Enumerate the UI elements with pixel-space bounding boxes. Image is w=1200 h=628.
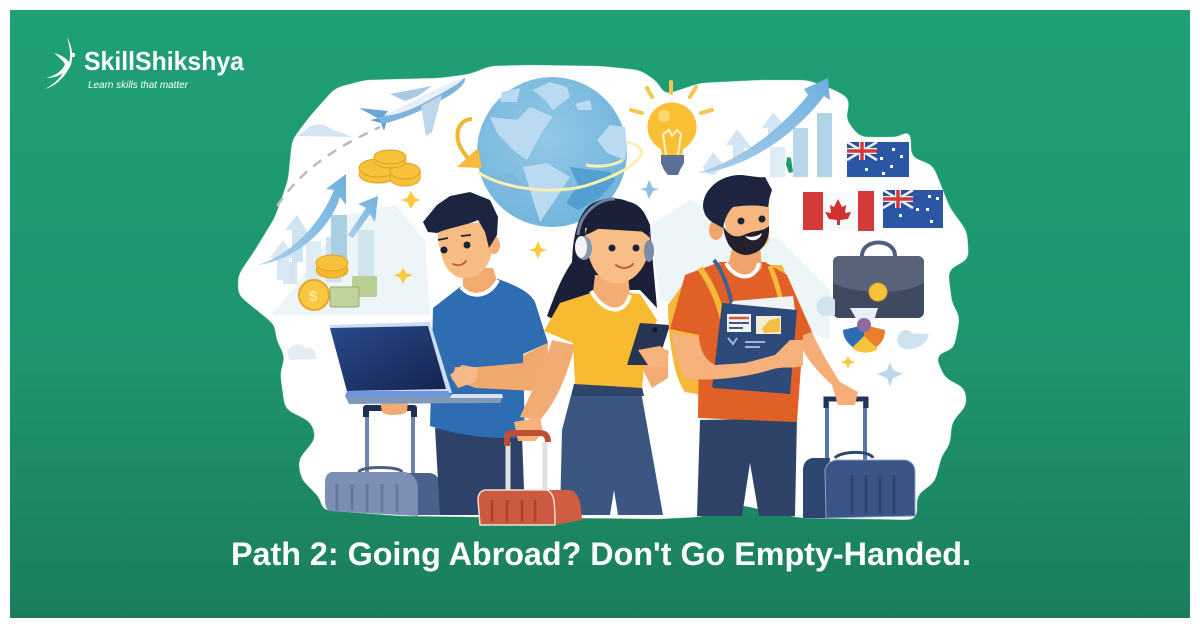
icon: briefcase	[833, 242, 924, 318]
chart ghost arrows	[270, 240, 296, 280]
green bit	[786, 157, 793, 173]
hair back	[547, 198, 657, 322]
trend arrow	[698, 78, 830, 173]
coins	[316, 262, 348, 278]
money pile	[299, 255, 377, 310]
hair	[703, 175, 772, 228]
icon: light bulb	[631, 82, 712, 175]
shirt collar	[461, 280, 498, 295]
phone forearm	[643, 350, 668, 388]
phone hand	[638, 346, 669, 368]
collar	[726, 263, 759, 277]
neck	[593, 275, 630, 307]
laptop hand under	[380, 401, 408, 415]
right growth chart	[698, 78, 832, 177]
star decoration centre	[640, 180, 659, 199]
face	[437, 222, 492, 278]
red suitcase	[478, 433, 582, 525]
chart bars	[770, 147, 785, 177]
pants	[435, 428, 525, 515]
flag: Canada	[803, 191, 874, 231]
chart trend arrow	[258, 174, 346, 265]
logo	[45, 37, 245, 91]
person: man	[668, 175, 915, 518]
right arm and hand	[803, 332, 858, 405]
left growth chart	[258, 174, 378, 285]
neck	[463, 268, 497, 293]
neck	[728, 245, 762, 276]
laptop	[329, 322, 503, 404]
flag: Australia top	[847, 142, 909, 177]
pants	[560, 384, 663, 515]
globe continents	[490, 107, 553, 160]
dashed flight path	[277, 127, 380, 206]
white cloud backdrop	[238, 65, 969, 520]
hand on laptop	[450, 365, 478, 388]
sparkle stars right	[841, 356, 855, 369]
star	[401, 191, 421, 209]
left arm	[520, 340, 575, 420]
folder	[712, 303, 797, 394]
bills	[352, 276, 377, 297]
pants	[697, 418, 797, 516]
eyes and smile	[608, 244, 616, 252]
money pile: $	[309, 288, 318, 305]
icon: pie shape	[843, 308, 885, 353]
backpack	[668, 270, 710, 395]
phone	[627, 323, 670, 365]
globe ring	[478, 142, 642, 190]
headphones	[575, 199, 654, 262]
person: boy	[325, 192, 548, 516]
logo tagline: Learn skills that matter	[88, 79, 188, 91]
arm	[452, 343, 548, 391]
waistband	[572, 384, 644, 396]
shirt	[544, 290, 657, 388]
hair	[423, 192, 498, 248]
beard	[723, 226, 769, 255]
fringe	[585, 201, 650, 238]
eyes	[738, 218, 744, 224]
logo wordmark: SkillShikshya	[84, 46, 245, 76]
person: girl	[514, 198, 670, 515]
flag: Australia bottom	[883, 190, 943, 228]
logo icon: leaping figure	[45, 37, 75, 89]
clouds right	[897, 330, 929, 349]
backpack straps	[700, 268, 725, 330]
soft haze behind left chart	[272, 205, 430, 315]
sparkle stars left	[394, 241, 547, 284]
shirt	[430, 279, 548, 438]
shirt	[670, 262, 812, 422]
face	[585, 228, 650, 284]
arm holding folder	[672, 333, 803, 380]
smile	[745, 233, 762, 240]
icon: airplane	[359, 78, 465, 136]
hand on red case	[514, 417, 543, 441]
eyes and smile	[440, 246, 448, 254]
orbit arrow	[457, 119, 474, 164]
chart bars	[283, 262, 297, 284]
coin stack top	[359, 150, 421, 186]
shirt collar	[591, 291, 630, 310]
papers	[728, 296, 795, 312]
bulb rays	[631, 82, 712, 113]
blue suitcase	[803, 399, 915, 518]
gray suitcase	[325, 408, 441, 516]
chart ghost arrows	[703, 112, 787, 175]
cloud top left	[296, 124, 352, 137]
icon: globe	[457, 77, 642, 227]
face	[722, 197, 769, 252]
cloud left lower	[287, 344, 316, 360]
title: Path 2: Going Abroad? Don't Go Empty-Handed.	[231, 536, 971, 572]
soft haze behind man	[650, 200, 830, 340]
